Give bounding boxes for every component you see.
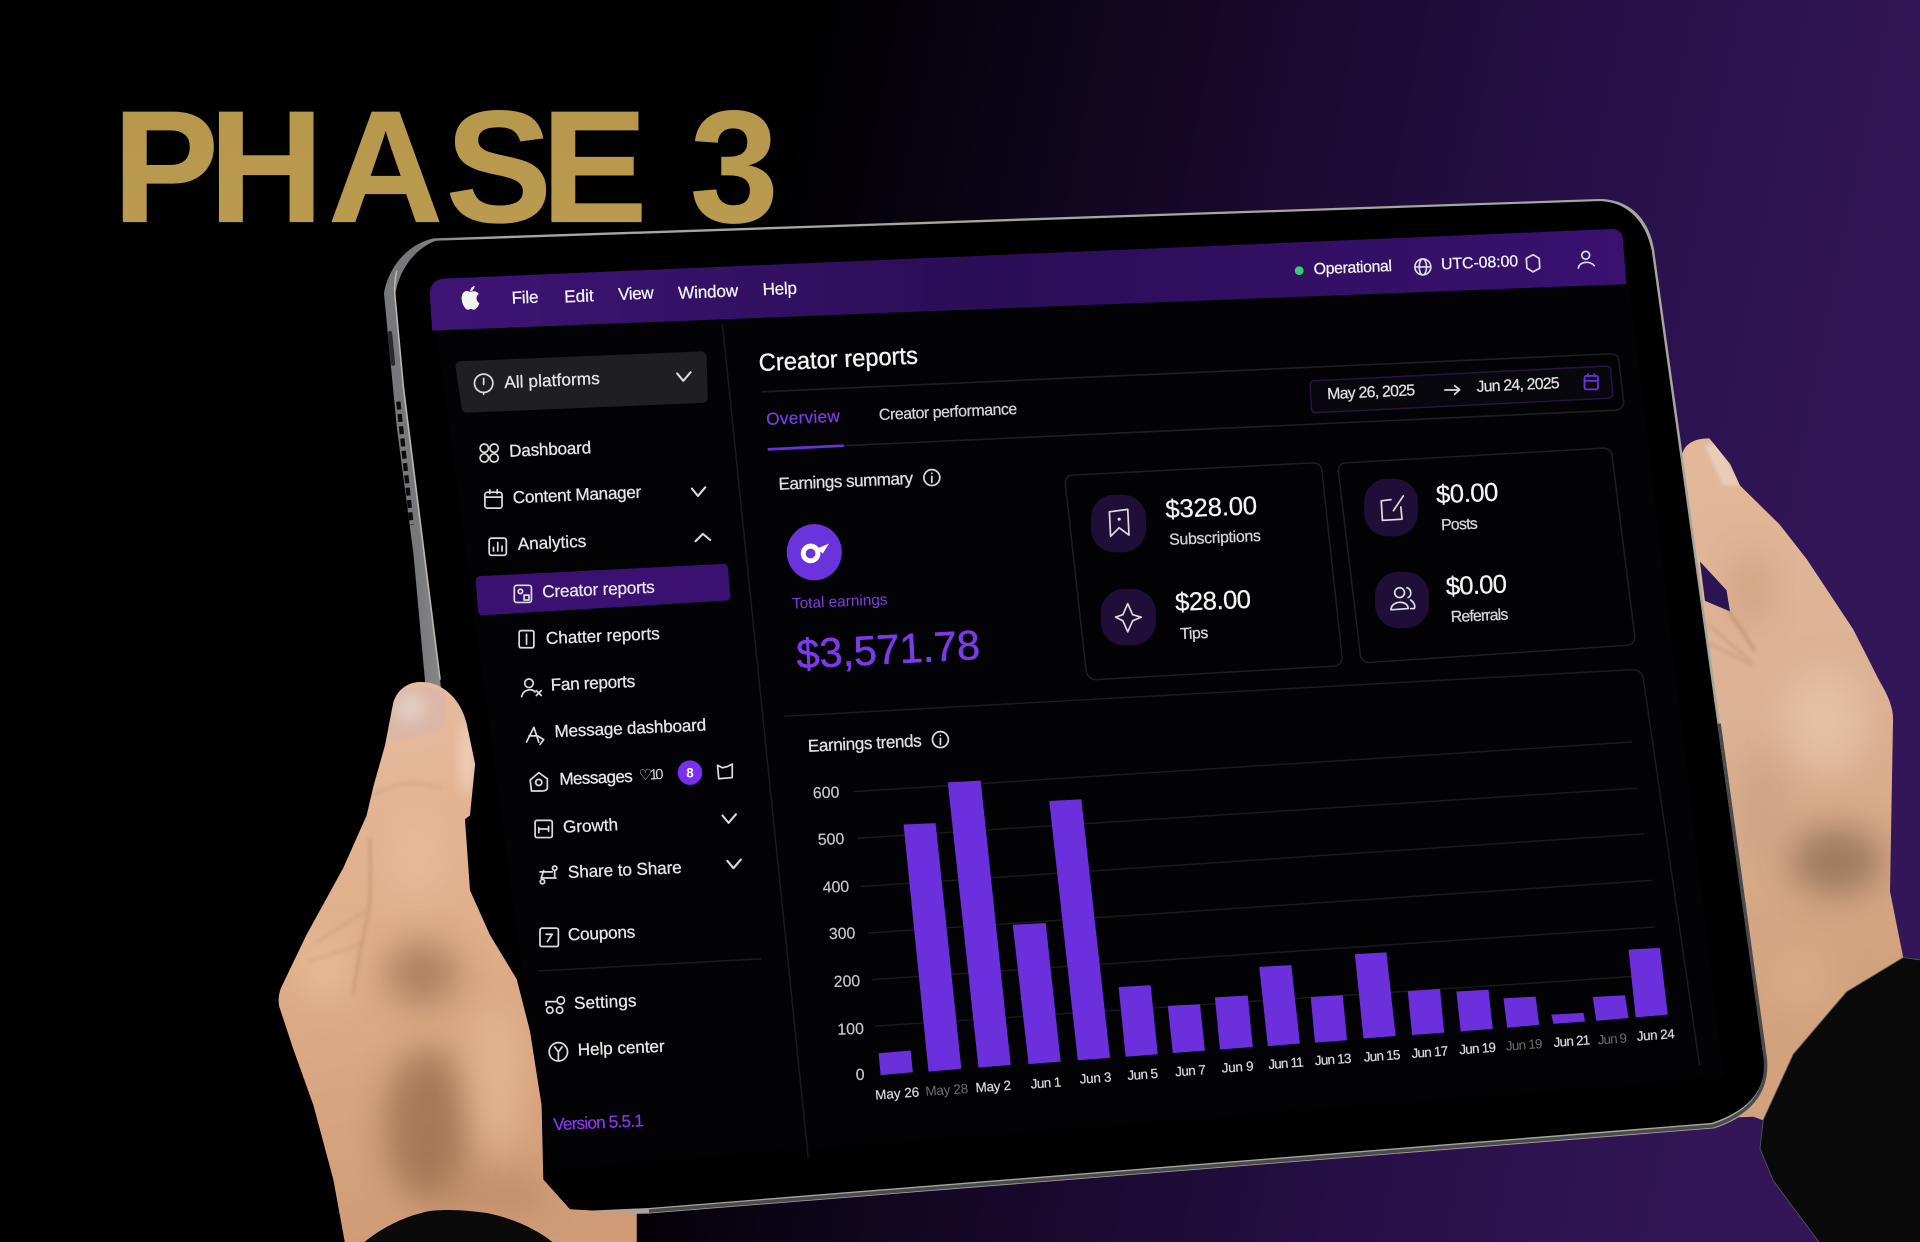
- label: Tips: Tips: [1180, 625, 1209, 643]
- screen: [431, 235, 1724, 1169]
- nav: Creator reports: Creator reports: [542, 577, 655, 602]
- label: Posts: Posts: [1441, 516, 1478, 534]
- nav: Share to Share: Share to Share: [567, 857, 682, 882]
- badge: [678, 760, 702, 785]
- status: Operational: Operational: [1313, 258, 1392, 278]
- label: Subscriptions: Subscriptions: [1169, 528, 1261, 549]
- sidebar navigation: [460, 356, 762, 1134]
- tablet inner highlight: [395, 271, 440, 680]
- icon: user: [1578, 251, 1594, 268]
- chevron: [696, 534, 710, 541]
- status dot: [1295, 266, 1304, 275]
- date range: Jun 24, 2025: [1476, 375, 1560, 396]
- earnings summary: [778, 468, 981, 678]
- icon: pin: [718, 764, 732, 779]
- icon: platform: [474, 374, 493, 394]
- tablet frame: [384, 199, 1767, 1216]
- gap between fingers: [1700, 562, 1730, 611]
- x axis labels: Jun 9: [1221, 1058, 1254, 1076]
- chevron: [677, 372, 691, 381]
- tab: Creator performance: Creator performance: [879, 401, 1018, 424]
- icon: growth: [535, 820, 552, 838]
- icon: info: [932, 732, 948, 748]
- header panel: [758, 343, 1624, 449]
- chevron: [692, 487, 705, 496]
- x axis labels: Jun 9: [1597, 1030, 1627, 1047]
- x axis labels: Jun 24: [1636, 1026, 1676, 1044]
- title: PHASE 3: PHASE 3: [113, 78, 779, 256]
- icon: info: [924, 470, 940, 486]
- y axis labels: 600: [813, 784, 840, 802]
- icon: refresh: [1526, 255, 1540, 272]
- bars: [879, 781, 1668, 1075]
- icon: chatter reports: [519, 631, 534, 648]
- date range: May 26, 2025: [1327, 382, 1416, 403]
- nav: Chatter reports: Chatter reports: [545, 623, 660, 648]
- value: subscriptions: $328.00: [1165, 492, 1258, 524]
- right sleeve: [1760, 958, 1920, 1242]
- x axis labels: May 2: [975, 1078, 1012, 1095]
- nav: Dashboard: Dashboard: [509, 437, 592, 461]
- y axis labels: 100: [837, 1021, 864, 1039]
- total value: $3,571.78: [795, 621, 981, 678]
- nav: Message dashboard: Message dashboard: [554, 715, 707, 741]
- x axis labels: Jun 13: [1314, 1051, 1352, 1068]
- heading: Earnings summary: Earnings summary: [778, 468, 914, 494]
- x axis labels: Jun 3: [1079, 1069, 1112, 1087]
- y axis labels: 0: [855, 1067, 865, 1084]
- icon: calendar: [1584, 373, 1598, 389]
- tablet side button: [390, 333, 393, 364]
- x axis labels: Jun 15: [1363, 1047, 1401, 1065]
- tab: Overview: Overview: [766, 406, 841, 429]
- menu: Edit: Edit: [564, 285, 594, 306]
- x axis labels: May 28: [925, 1081, 969, 1099]
- icon: creator reports: [514, 585, 531, 602]
- label: Total earnings: Total earnings: [792, 591, 888, 613]
- x axis labels: Jun 5: [1127, 1066, 1159, 1083]
- icon: referrals: [1375, 572, 1429, 628]
- left sleeve: [363, 1210, 553, 1242]
- value: posts: $0.00: [1435, 479, 1499, 509]
- version: Version 5.5.1: [553, 1110, 644, 1134]
- chevron: [727, 860, 741, 868]
- header outline: [762, 354, 1624, 446]
- x axis labels: Jun 1: [1030, 1074, 1062, 1092]
- icon: post: [1364, 479, 1418, 536]
- nav: Settings: Settings: [574, 990, 637, 1013]
- tablet: [384, 199, 1767, 1216]
- icon: analytics: [489, 538, 506, 555]
- x axis labels: Jun 7: [1175, 1062, 1206, 1079]
- menu: Window: Window: [678, 280, 739, 303]
- chevron: [722, 814, 736, 823]
- badge: 8: [686, 766, 694, 781]
- x axis labels: Jun 17: [1411, 1043, 1449, 1061]
- icon: globe: [1415, 259, 1431, 275]
- y axis labels: 200: [833, 973, 861, 991]
- nav: Analytics: Analytics: [517, 531, 587, 554]
- nav: Growth: Growth: [563, 814, 618, 837]
- nav: Content Manager: Content Manager: [512, 482, 642, 507]
- messages count: ♡10: [639, 767, 664, 784]
- date range: [1310, 366, 1613, 413]
- x axis labels: Jun 21: [1553, 1032, 1591, 1050]
- value: referrals: $0.00: [1445, 570, 1508, 601]
- menu: File: File: [511, 287, 539, 308]
- icon: content manager: [485, 490, 502, 508]
- active item highlight: [480, 568, 726, 611]
- y axis labels: 300: [829, 925, 856, 943]
- tablet lower edge shading: [649, 724, 1766, 1211]
- label: Referrals: Referrals: [1450, 607, 1509, 626]
- right hand holding tablet: [1682, 438, 1904, 1120]
- icon: fan reports: [522, 679, 541, 697]
- left hand holding tablet: [279, 682, 637, 1242]
- menu: View: View: [618, 283, 655, 304]
- icon: share: [540, 866, 557, 884]
- tablet speaker holes: [398, 402, 412, 525]
- heading: Creator reports: Creator reports: [758, 343, 918, 377]
- nav: Help center: Help center: [577, 1036, 665, 1060]
- icon: settings: [546, 997, 564, 1013]
- heading: Earnings trends: Earnings trends: [807, 730, 922, 756]
- tablet bezel: [395, 201, 1764, 1211]
- nav: Messages: Messages: [559, 766, 633, 789]
- icon: coupons: [540, 928, 558, 947]
- x axis labels: Jun 19: [1459, 1040, 1496, 1057]
- x axis labels: Jun 11: [1268, 1055, 1304, 1072]
- value: tips: $28.00: [1175, 586, 1252, 617]
- nav: Fan reports: Fan reports: [550, 671, 636, 695]
- icon: help: [549, 1043, 568, 1061]
- logo circle: [787, 524, 842, 580]
- x axis labels: Jun 19: [1505, 1036, 1543, 1054]
- card: subscriptions and tips: [1065, 463, 1342, 680]
- label: All platforms: All platforms: [504, 368, 600, 392]
- thumb nail: [388, 687, 445, 743]
- icon: sparkle: [1101, 589, 1156, 645]
- earnings trends chart: [784, 670, 1700, 1103]
- icon: messages: [530, 773, 547, 791]
- icon: bookmark: [1091, 495, 1146, 552]
- sidebar divider: [722, 324, 808, 1157]
- icon: dashboard: [480, 444, 498, 462]
- icon: apple: [462, 286, 479, 310]
- nav: Coupons: Coupons: [567, 921, 636, 944]
- y axis labels: [813, 784, 865, 1084]
- y axis labels: 500: [818, 831, 845, 849]
- card: posts and referrals: [1338, 448, 1635, 662]
- tab underline: [768, 446, 844, 449]
- timezone: UTC-08:00: [1441, 253, 1519, 273]
- y axis labels: 400: [822, 879, 850, 897]
- menu bar: [430, 229, 1626, 331]
- platform selector: [460, 356, 703, 408]
- menu: Help: Help: [762, 278, 797, 299]
- x axis labels: [875, 1026, 1676, 1103]
- x axis labels: May 26: [875, 1085, 920, 1103]
- icon: message dashboard: [527, 727, 544, 744]
